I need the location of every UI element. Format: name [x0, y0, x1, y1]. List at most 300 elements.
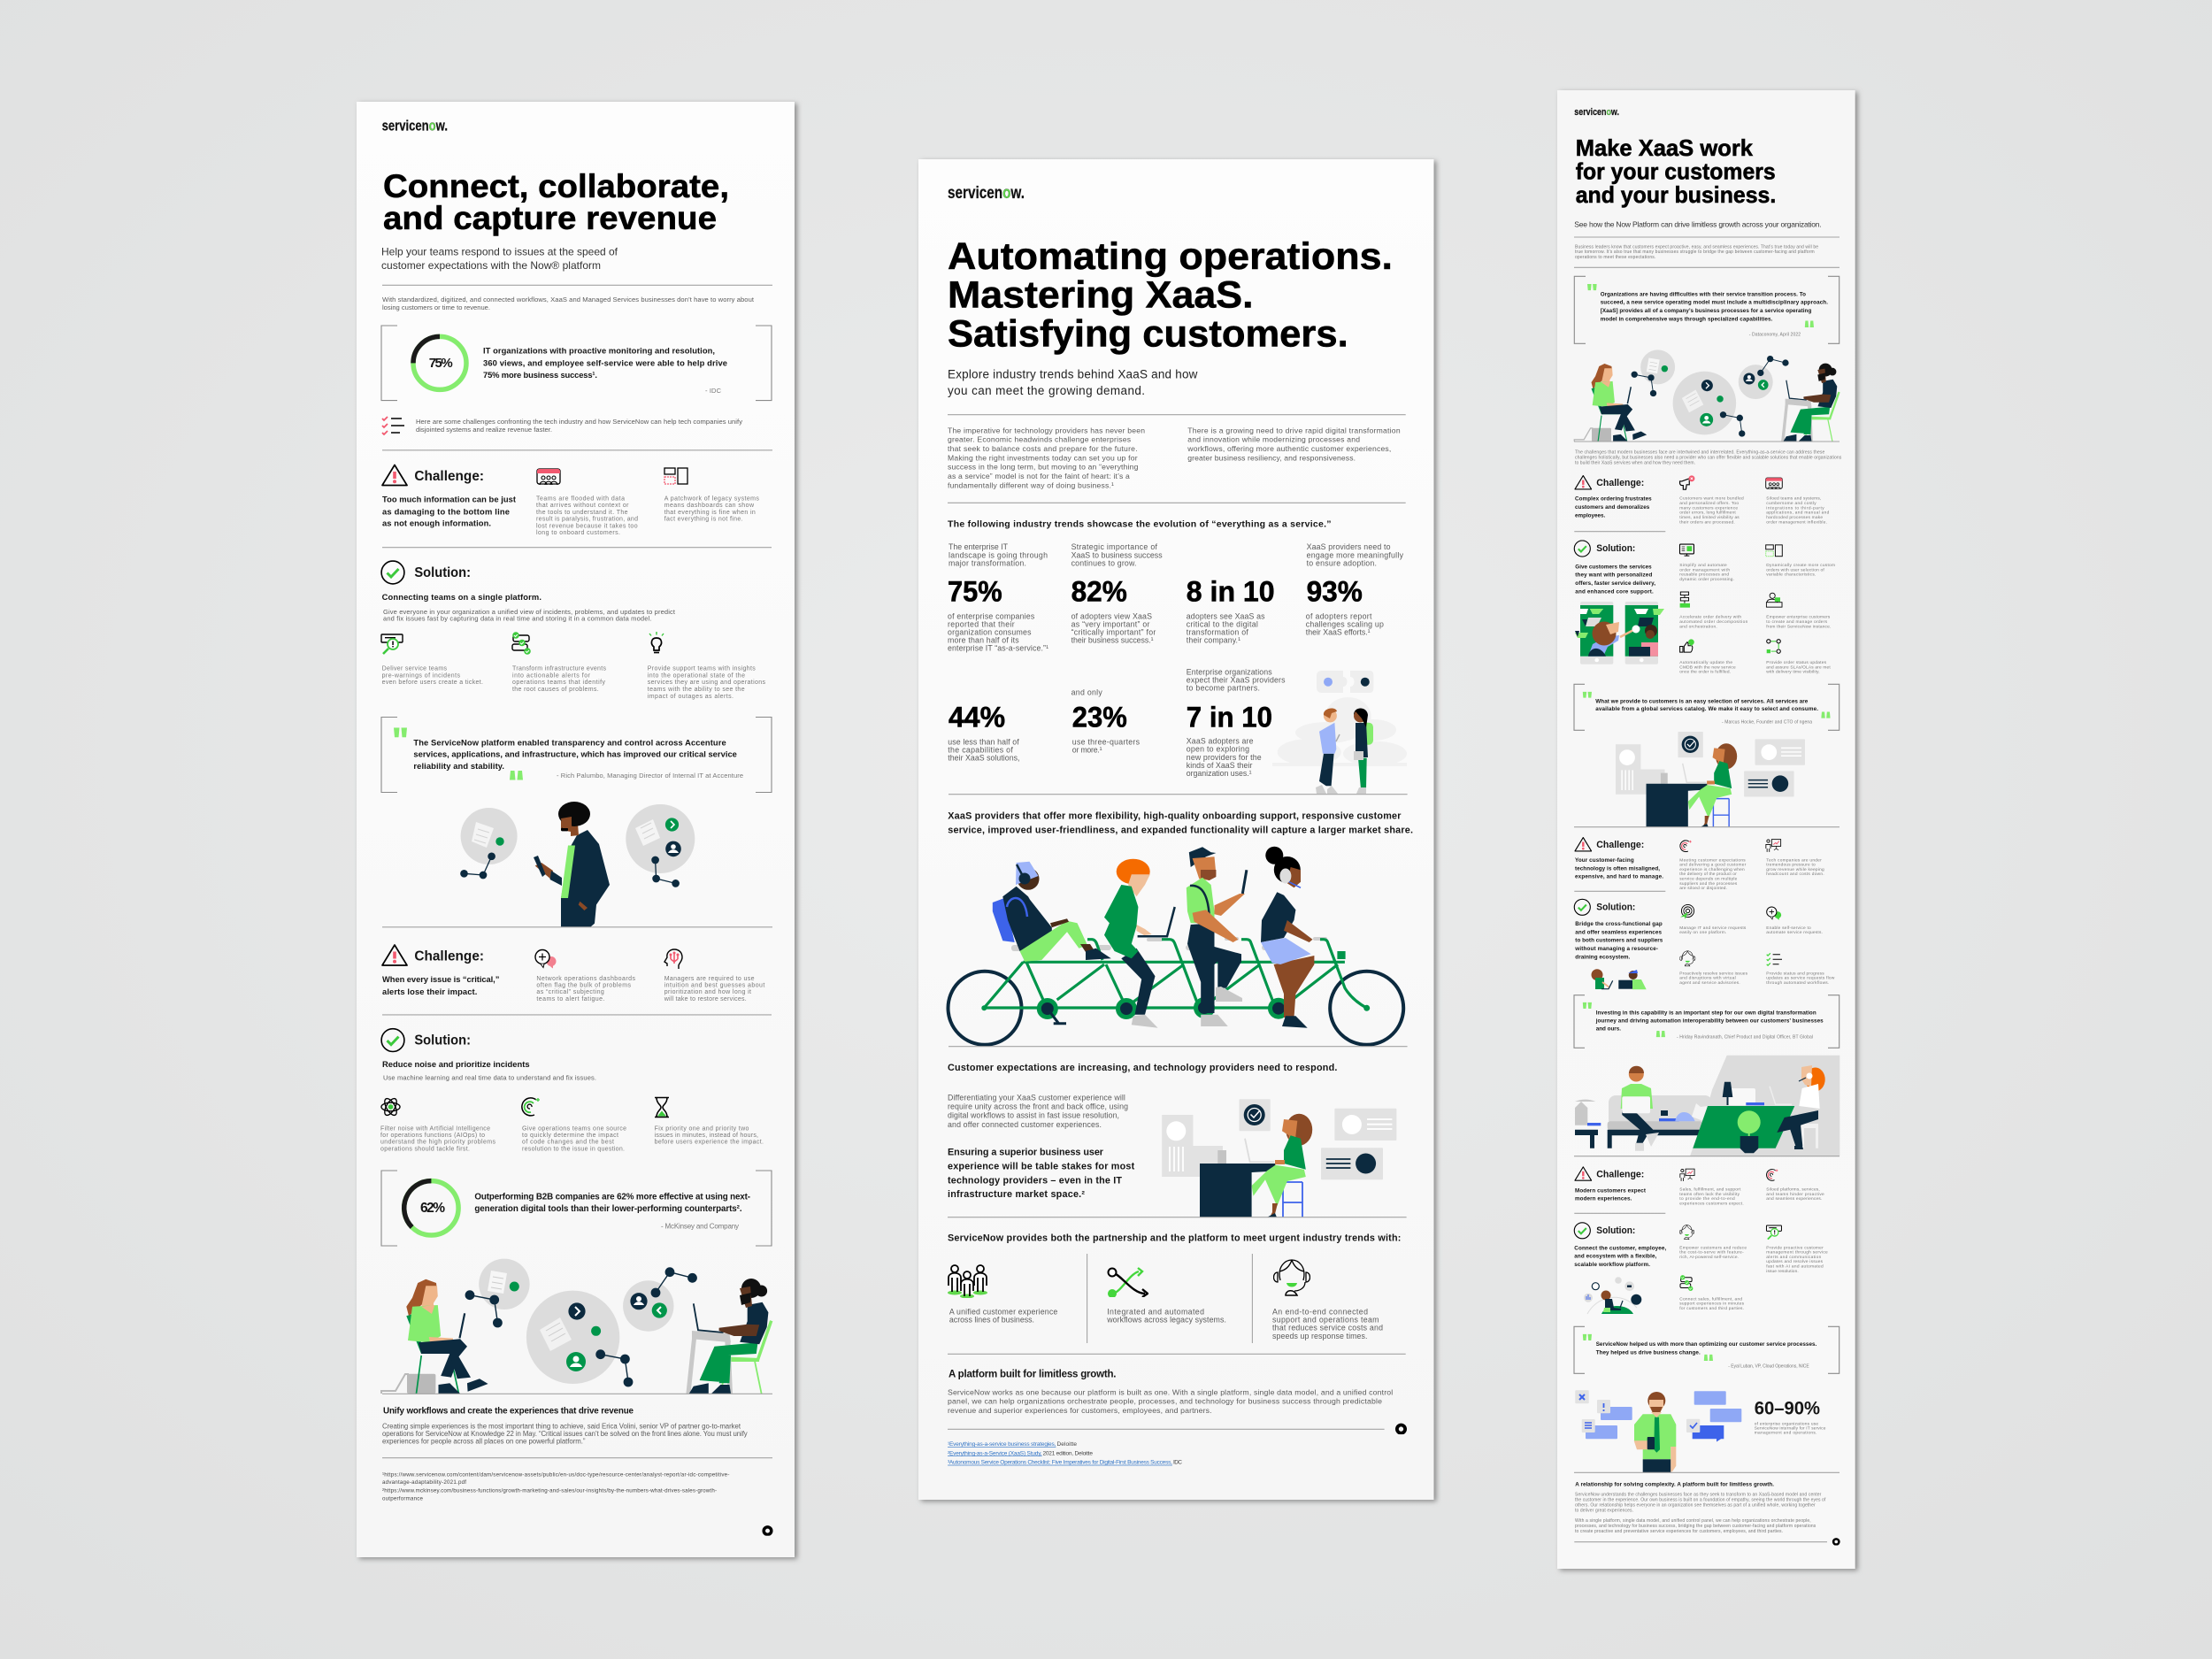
intro text: With standardized, digitized, and connected workflows, XaaS and Managed Services businesses don’t have to worry about [382, 296, 755, 303]
illustration: two colleagues at laptops [1591, 969, 1647, 989]
title: Connect, collaborate, [383, 168, 729, 204]
solution: cross-functional: through automated workflows. [1766, 980, 1829, 986]
illustration: office scene [1575, 1056, 1839, 1156]
statement: service, improved user-friendliness, and expanded functionality will capture a larger market share. [948, 825, 1413, 835]
solution: ordering: and orchestration. [1679, 624, 1717, 629]
challenge: customer-facing technology: the delivery of the product or [1679, 872, 1737, 877]
challenge: customer-facing technology: service depends on multiple [1679, 876, 1738, 881]
stat callout 62% [381, 1171, 772, 1246]
heading: partnership: ServiceNow provides both the partnership and the platform to meet urgent industry trends with: [948, 1233, 1401, 1244]
title: Automating operations. [948, 235, 1393, 278]
challenge: modern customers: Sales, fulfillment, and support [1679, 1187, 1741, 1193]
logo mark [1394, 1425, 1407, 1436]
illustration: man with phone and data bubbles [461, 802, 695, 927]
donut chart 75% [413, 336, 466, 389]
challenge: modern customers: experiences customers expect. [1679, 1202, 1744, 1207]
solution 2: understand the high priority problems [380, 1140, 495, 1146]
stats grid: their business success.¹ [1071, 635, 1154, 644]
stats grid: and only [1071, 687, 1102, 696]
challenge: customer-facing technology: tremendous pressure to [1766, 863, 1816, 868]
challenge 2: intuition and best guesses about [664, 983, 764, 989]
footnotes: ¹https://www.servicenow.com/content/dam/servicenow-assets/public/en-us/doc-type/resource-center/analyst-report/ar-idc-competitive- [382, 1471, 729, 1478]
solution: flexible platform: support experiences in minutes [1679, 1302, 1745, 1307]
solution 1: Connecting teams on a single platform. [382, 592, 541, 602]
solution 2: operations should tackle first. [380, 1147, 470, 1153]
stats grid: 82% [1071, 575, 1127, 607]
solution: cross-functional: Enable self-service to [1766, 926, 1811, 931]
solution: ordering: Automatically update the [1679, 660, 1732, 665]
solution: cross-functional [1574, 899, 1835, 986]
quote: Accenture: services, applications, and infrastructure, which has improved our critical service [413, 749, 737, 759]
three capabilities: support and operations team [1272, 1316, 1379, 1325]
quote: Dataconomy: Organizations are having difficulties with their service transition process. To [1601, 291, 1806, 297]
solution 2: Reduce noise and prioritize incidents [382, 1059, 530, 1069]
stats grid: 44% [949, 701, 1005, 733]
challenge: ordering: integrations to third-party [1766, 505, 1824, 511]
challenge: ordering: and personalized offers. Too [1679, 501, 1739, 506]
title [1576, 134, 1776, 208]
challenge 1: result is paralysis, frustration, and [536, 517, 638, 523]
challenge: customer-facing technology: suppliers and the processes [1679, 881, 1738, 887]
solution: ordering: they want with personalized [1575, 572, 1652, 579]
footnotes: IDC [1173, 1460, 1182, 1466]
three capabilities: Integrated and automated [1107, 1308, 1204, 1317]
challenge: modern customers: Siloed platforms, services, [1766, 1187, 1820, 1193]
solution: ordering: dynamic order processing. [1679, 577, 1734, 582]
solution: cross-functional: draining ecosystem. [1575, 954, 1631, 960]
title [383, 168, 729, 236]
stat text: 75% more business success¹. [483, 370, 597, 380]
stat 60-90%: of enterprise organizations use [1755, 1421, 1818, 1426]
quote: ngena: available from a global services catalog. We make it easy to select and consume. [1595, 706, 1818, 712]
solution: flexible platform: issue resolution. [1766, 1269, 1799, 1274]
solution: ordering: Accelerate order delivery with [1679, 615, 1741, 620]
stats grid: their company.¹ [1187, 635, 1240, 644]
three capabilities: A unified customer experience [949, 1308, 1057, 1317]
body text: differentiating: require unity across the front and back office, using [948, 1102, 1128, 1110]
closing text: processes, and technology for business success, bridging the gap between customer-facing and platform operations [1575, 1524, 1816, 1529]
callout: superior experience: technology providers – even in the IT [948, 1175, 1122, 1186]
stats grid: engage more meaningfully [1307, 550, 1404, 559]
solution: ordering: Provide order status updates [1766, 660, 1827, 665]
title [948, 235, 1393, 355]
intro columns: as a service” model is not for the faint of heart: it’s a [948, 472, 1130, 480]
stats grid [948, 542, 1404, 778]
rider 3 [1187, 847, 1247, 1026]
stat text: IT organizations with proactive monitoring and resolution, [483, 346, 715, 356]
quote: ngena: - Marcus Hocke, Founder and CTO of ngena [1722, 719, 1812, 725]
three capabilities: An end-to-end connected [1272, 1308, 1368, 1317]
quote: Accenture: reliability and stability. [413, 761, 504, 771]
solution: ordering: automated order decomposition [1679, 619, 1748, 625]
solution: cross-functional: agent and service advisories. [1679, 980, 1740, 986]
challenge 1: Too much information can be just [382, 495, 516, 504]
stats grid: enterprise IT “as-a-service.”¹ [948, 644, 1048, 653]
challenge: modern customers: modern experiences. [1575, 1196, 1632, 1202]
stats grid: of adopters report [1306, 611, 1372, 620]
stats grid: Strategic importance of [1071, 542, 1158, 551]
closing text: Unify workflows and create the experiences that drive revenue [383, 1406, 634, 1416]
solution: flexible platform: management through service [1766, 1250, 1828, 1256]
intro columns: Making the right investments today can set you up for [948, 453, 1138, 462]
challenge 2: Network operations dashboards [536, 976, 635, 982]
intro: true tomorrow. It’s also true that many businesses struggle to bridge the gap between customer-facing and platform [1575, 250, 1815, 255]
challenge: customer-facing technology: Meeting customer expectations [1679, 857, 1746, 863]
rider 2 [1104, 859, 1175, 1028]
solution: ordering: variable characteristics. [1766, 572, 1816, 578]
challenge: customer-facing technology: are siloed or disjointed. [1679, 886, 1727, 891]
challenge: modern customers [1575, 1167, 1824, 1207]
title: and your business. [1576, 181, 1776, 208]
challenge: modern customers: and teams hinder proactive [1766, 1192, 1824, 1197]
solution 2: Fix priority one and priority two [655, 1125, 749, 1132]
solution 1: impact of outages as alerts. [648, 694, 733, 700]
stats grid: critical to the digital [1187, 619, 1258, 628]
heading: trends: The following industry trends showcase the evolution of “everything as a service.” [948, 519, 1331, 530]
illustration: team on laptops [1574, 349, 1839, 442]
challenge: modern customers: Challenge: [1596, 1169, 1644, 1179]
stats grid: kinds of XaaS their [1187, 761, 1252, 770]
footnotes: ¹Everything-as-a-service business strategies, [948, 1441, 1056, 1448]
quote: Dataconomy [1574, 276, 1839, 343]
solution: flexible platform [1574, 1223, 1828, 1311]
body text: challenges holistically, but businesses also need a provider who can offer flexible and scalable solutions that enable organizations [1575, 456, 1842, 461]
closing text [1575, 1481, 1826, 1534]
challenge: modern customers: teams often lack the visibility [1679, 1192, 1740, 1197]
subtitle [948, 368, 1198, 397]
solution: cross-functional: without managing a resource- [1574, 946, 1658, 952]
footnotes: ³Autonomous Service Operations Checklist: Five Imperatives for Digital-First Business Success, [948, 1460, 1172, 1466]
stats grid: 8 in 10 [1187, 575, 1275, 607]
stats grid: The enterprise IT [949, 542, 1009, 551]
stat text: 360 views, and employee self-service were able to help drive [483, 357, 727, 367]
panel: connect collaborate capture revenue [357, 102, 797, 1559]
solution: ordering: orders with user selection of [1766, 567, 1824, 572]
footnotes: ²https://www.mckinsey.com/business-functions/growth-marketing-and-sales/our-insights/by-the-numbers-what-drives-sales-growth- [382, 1488, 717, 1494]
illustration: woman at desk [1616, 732, 1805, 827]
challenge 2: When every issue is “critical,” [382, 974, 499, 984]
body text: differentiating: Differentiating your XaaS customer experience will [948, 1093, 1125, 1102]
challenge 1: fact everything is not fine. [664, 517, 743, 523]
challenge 1: as not enough information. [382, 518, 491, 528]
three capabilities: workflows across legacy systems. [1106, 1316, 1226, 1325]
panel: make XaaS work [1557, 90, 1858, 1571]
donut chart 62%: 62% [420, 1201, 445, 1216]
solution: ordering: and enhanced core support. [1575, 588, 1654, 595]
challenge 2: as “critical” subjecting [536, 989, 604, 995]
solution: flexible platform: for customers and third parties. [1679, 1306, 1744, 1311]
solution 2: Use machine learning and real time data to understand and fix issues. [383, 1073, 596, 1081]
intro columns: There is a growing need to drive rapid digital transformation [1187, 426, 1401, 434]
stats grid: more than half of its [948, 635, 1019, 644]
body text: differentiating: and offer connected customer experiences. [948, 1120, 1102, 1129]
closing text: A relationship for solving complexity. A platform built for limitless growth. [1575, 1481, 1774, 1487]
quote: Accenture: The ServiceNow platform enabled transparency and control across Accenture [413, 737, 726, 747]
checklist intro [382, 417, 742, 434]
illustration: four riders on tandem bike [949, 847, 1403, 1045]
solution: ordering: order management with [1679, 567, 1730, 572]
footnotes: Deloitte [1056, 1441, 1077, 1448]
source: - IDC [705, 387, 722, 395]
quote: Accenture [381, 717, 772, 793]
stats grid: organization consumes [948, 627, 1032, 636]
title: and capture revenue [383, 200, 717, 236]
body text: platform: revenue and superior experiences for customers, employees, and partners. [948, 1406, 1212, 1415]
checklist intro: disjointed systems and realize revenue faster. [416, 426, 552, 434]
solution 1: even before users create a ticket. [382, 680, 483, 686]
donut chart 75%: 75% [429, 356, 453, 371]
challenge: ordering: Challenge: [1596, 478, 1644, 488]
solution: flexible platform: scalable workflow platform. [1574, 1262, 1650, 1268]
rider 1 [993, 862, 1111, 962]
title: Mastering XaaS. [948, 274, 1253, 317]
solution: cross-functional: Proactively resolve service issues [1679, 971, 1748, 976]
solution: cross-functional: to both customers and suppliers [1575, 938, 1663, 944]
callout: superior experience [948, 1148, 1135, 1200]
challenge 2: teams to alert fatigue. [536, 996, 604, 1002]
donut chart 62% [404, 1181, 458, 1235]
stats grid: as “very important” or [1071, 619, 1149, 628]
challenge 1: long to onboard customers. [536, 530, 620, 536]
challenge: ordering: Complex ordering frustrates [1575, 496, 1652, 503]
quote: BT Global: Investing in this capability is an important step for our own digital transformation [1596, 1010, 1816, 1016]
challenge: ordering: their orders are processed. [1679, 519, 1735, 525]
three capabilities: across lines of business. [949, 1316, 1034, 1325]
solution 2: of code changes and the best [522, 1140, 614, 1146]
closing text: the customer in the experience. Our own business is built on a foundation of empathy, seeing the world through the eyes of [1575, 1498, 1826, 1503]
closing text: experiences for people across all places on one powerful platform.” [382, 1438, 586, 1446]
subtitle: Help your teams respond to issues at the speed of [381, 246, 618, 258]
three capabilities: that reduces service costs and [1272, 1324, 1383, 1333]
footnotes: ²Everything-as-a-Service (XaaS) Study, [948, 1450, 1042, 1456]
closing text: With a single platform, single data model, and unified control panel, we can help organizations orchestrate people, [1575, 1518, 1811, 1524]
challenge: modern customers: to provide the end-to-end [1679, 1196, 1735, 1202]
solution 2: issues in minutes, instead of hours, [655, 1133, 758, 1139]
stat 60-90% [1755, 1399, 1826, 1436]
stats grid: transformation of [1187, 627, 1248, 636]
illustration: phones with folders [1575, 602, 1664, 664]
title: for your customers [1576, 158, 1776, 185]
closing text: Creating simple experiences is the most important thing to achieve, said Erica Volini, senior VP of partner go-to-market [382, 1422, 741, 1430]
logo: servicenow. [382, 118, 448, 134]
solution: cross-functional: and disruptions with virtual [1679, 976, 1736, 981]
solution: ordering: reusable processes and [1679, 572, 1729, 578]
stats grid: 7 in 10 [1187, 701, 1272, 733]
challenge 1: lost revenue because it takes too [536, 523, 638, 529]
closing text: to create proactive and preventative service experiences for customers, employees, and third parties. [1575, 1529, 1783, 1534]
stats grid: XaaS providers need to [1307, 542, 1391, 551]
intro columns: that seek to balance costs and prepare for the future. [948, 444, 1138, 453]
challenge: customer-facing technology: experience is challenging when [1679, 867, 1745, 872]
intro columns: workflows, offering more authentic customer experiences, [1187, 444, 1391, 453]
solution: ordering: Empower enterprise customers [1766, 615, 1831, 620]
solution 2: to quickly determine the impact [522, 1133, 618, 1139]
solution: ordering: Give customers the services [1575, 564, 1652, 570]
challenge: modern customers: Modern customers expect [1575, 1187, 1647, 1194]
solution: ordering: Dynamically create more custom [1766, 563, 1835, 568]
challenge: customer-facing technology: Tech companies are under [1766, 857, 1822, 863]
solution 1: Transform infrastructure events [512, 666, 607, 672]
challenge: customer-facing technology: technology is often misaligned, [1575, 865, 1660, 872]
solution 2: before users experience the impact. [655, 1139, 764, 1145]
challenge 2: will take to restore services. [664, 996, 747, 1002]
footnotes: outperformance [382, 1496, 424, 1502]
heading: customer expectations: Customer expectations are increasing, and technology providers need to respond. [948, 1063, 1337, 1073]
footnotes: advantage-adaptability-2021.pdf [382, 1479, 466, 1486]
solution: cross-functional: Manage IT and service requests [1679, 926, 1747, 931]
intro [1575, 244, 1818, 260]
footnotes: 2021 edition, Deloitte [1042, 1450, 1093, 1456]
challenge: modern customers: and seamless experiences. [1766, 1196, 1822, 1202]
intro: operations to meet these expectations. [1575, 255, 1655, 260]
stat callout 75% [381, 326, 772, 401]
statement [948, 810, 1413, 835]
stats grid: XaaS adopters are [1187, 737, 1254, 746]
challenge 1: as damaging to the bottom line [382, 506, 510, 516]
solution 1: Solution: [414, 565, 471, 580]
intro: Business leaders know that customers expect proactive, easy, and seamless experiences. That’s true today and will be [1575, 244, 1818, 250]
title: Satisfying customers. [948, 312, 1348, 355]
solution: flexible platform: Connect the customer, employee, [1574, 1245, 1667, 1251]
stats grid: their XaaS solutions, [948, 754, 1019, 763]
stats grid: expect their XaaS providers [1187, 675, 1286, 684]
solution: cross-functional: updates as service requests flow [1766, 976, 1835, 981]
quote: Dataconomy: [XaaS] provides all of a company’s business processes for a service operating [1601, 308, 1811, 314]
quote: Accenture: - Rich Palumbo, Managing Director of Internal IT at Accenture [557, 772, 743, 780]
challenge 1: Teams are flooded with data [536, 495, 625, 502]
intro text: losing customers or time to revenue. [382, 303, 490, 311]
subtitle: you can meet the growing demand. [948, 384, 1145, 397]
challenge 1: A patchwork of legacy systems [664, 495, 759, 502]
intro columns: fundamentally different way of doing business.¹ [948, 480, 1114, 489]
subtitle: See how the Now Platform can drive limitless growth across your organization. [1574, 220, 1822, 229]
subtitle [381, 246, 618, 272]
challenge: customer-facing technology: Challenge: [1596, 840, 1644, 850]
stats grid: landscape is going through [949, 550, 1048, 559]
quote: NICE [1574, 1326, 1839, 1373]
intro columns [948, 426, 1401, 489]
solution: ordering: and assure SLAs/OLAs are met [1766, 664, 1831, 670]
quote: BT Global: journey and driving automation interoperability between our customers’ businesses [1595, 1018, 1824, 1025]
solution 1: services they are using and operations [648, 680, 766, 686]
solution 1: into actionable alerts for [512, 672, 591, 680]
intro columns: greater business resiliency, and responsiveness. [1187, 453, 1356, 462]
quote: NICE: ServiceNow helped us with more than optimizing our customer service processes. [1596, 1341, 1817, 1348]
stats grid: use three-quarters [1072, 737, 1141, 746]
solution: ordering: offers, faster service delivery, [1575, 580, 1655, 587]
intro columns: success in the long term, but moving to an “everything [948, 463, 1139, 472]
body text: platform: panel, we can help organizations orchestrate people, processes, and technology for business success through predictable [948, 1397, 1382, 1406]
solution: flexible platform: Solution: [1596, 1225, 1635, 1236]
solution: cross-functional: easily on one platform. [1679, 930, 1726, 935]
challenge 2: Challenge: [414, 949, 484, 964]
stats grid: XaaS to business success [1071, 550, 1163, 559]
solution: cross-functional: Bridge the cross-functional gap [1575, 921, 1663, 927]
solution 1: Provide support teams with insights [648, 666, 756, 672]
challenge: customer-facing technology: Your customer-facing [1575, 857, 1634, 864]
solution: ordering: with delivery time visibility. [1766, 670, 1820, 675]
stats grid: their XaaS efforts.¹ [1306, 627, 1371, 636]
solution 1: and fix issues fast by capturing data in real time and storing it in a common data model. [383, 614, 651, 622]
intro columns: The imperative for technology providers has never been [948, 426, 1145, 434]
intro columns: and innovation while modernizing processes and [1187, 435, 1360, 444]
stats grid: of adopters view XaaS [1071, 611, 1152, 620]
solution 2 [380, 1029, 764, 1153]
stats grid: the capabilities of [948, 746, 1013, 755]
solution 1: Deliver service teams [382, 666, 448, 672]
solution: flexible platform: Connect sales, fulfillment, and [1679, 1296, 1742, 1302]
solution: flexible platform: alerts and communication [1766, 1255, 1822, 1260]
stats grid: of enterprise companies [948, 611, 1035, 620]
challenge 2: alerts lose their impact. [382, 987, 477, 996]
challenge 2: often flag the bulk of problems [536, 983, 632, 989]
logo mark [762, 1527, 773, 1538]
intro text [382, 296, 755, 311]
quote: BT Global: - Hriday Ravindranath, Chief Product and Digital Officer, BT Global [1677, 1034, 1813, 1040]
footnotes [948, 1441, 1182, 1466]
challenge: ordering: Siloed teams and systems, [1766, 496, 1821, 502]
challenge: ordering: Customers want more bundled [1679, 496, 1744, 502]
solution 1: teams with the ability to see the [648, 687, 745, 693]
solution 2: Filter noise with Artificial Intelligence [380, 1125, 490, 1132]
quote: BT Global: and ours. [1596, 1026, 1621, 1033]
challenge: customer-facing technology: grow revenue while keeping [1766, 867, 1824, 872]
challenge: ordering: order management inflexible. [1766, 519, 1827, 525]
solution: ordering: from their ServiceNow instance. [1766, 624, 1831, 629]
quote: Dataconomy: - Dataconomy, April 2022 [1749, 332, 1801, 337]
checklist intro: Here are some challenges confronting the tech industry and how ServiceNow can help tech companies unify [416, 418, 742, 426]
logo: servicenow. [1574, 107, 1619, 118]
stats grid: major transformation. [949, 558, 1026, 567]
solution: cross-functional: automate service requests. [1766, 930, 1823, 935]
solution: cross-functional: and offer seamless experiences [1575, 929, 1662, 935]
stats grid: 93% [1307, 575, 1363, 607]
closing text: ServiceNow understands the challenges businesses face as they seek to transform to an XaaS-based model and center [1575, 1493, 1822, 1498]
solution 1 [381, 561, 766, 700]
stats grid: or more.¹ [1072, 746, 1102, 755]
solution: flexible platform: updates and resolve issues [1766, 1259, 1824, 1264]
challenge 2: Managers are required to use [664, 976, 755, 982]
stats grid: to ensure adoption. [1307, 558, 1377, 567]
quote: ngena [1574, 684, 1839, 730]
challenge: customer-facing technology: expensive, and hard to manage. [1575, 874, 1663, 880]
statement: XaaS providers that offer more flexibility, high-quality onboarding support, responsive customer [948, 810, 1402, 821]
subtitle: Explore industry trends behind XaaS and how [948, 368, 1198, 381]
solution 1: pre-warnings of incidents [382, 672, 460, 680]
stats grid: use less than half of [948, 737, 1019, 746]
illustration: woman with orbiting icons [1584, 1277, 1641, 1314]
body text: differentiating [948, 1093, 1128, 1129]
title: Make XaaS work [1576, 134, 1754, 161]
panel: automating operations [918, 159, 1437, 1502]
stats grid: new providers for the [1187, 753, 1262, 762]
callout: superior experience: experience will be table stakes for most [948, 1162, 1135, 1172]
three capabilities: speeds up response times. [1272, 1332, 1368, 1340]
solution: ordering [1574, 541, 1835, 675]
stat text [483, 346, 727, 380]
challenge 2 [382, 945, 764, 1002]
closing text [382, 1406, 748, 1446]
solution 1: the root causes of problems. [512, 687, 599, 693]
solution: flexible platform: fast with AI and automated [1766, 1263, 1824, 1269]
stat callout 62%: - McKinsey and Company [661, 1223, 739, 1231]
body text: to build their XaaS services when and how they need them. [1575, 461, 1695, 466]
solution: cross-functional: Solution: [1596, 902, 1635, 913]
rider 4 [1261, 847, 1314, 1028]
stats grid: open to exploring [1187, 745, 1249, 754]
stat 60-90%: ServiceNow internally for IT service [1755, 1425, 1826, 1431]
body text: platform [948, 1387, 1393, 1415]
